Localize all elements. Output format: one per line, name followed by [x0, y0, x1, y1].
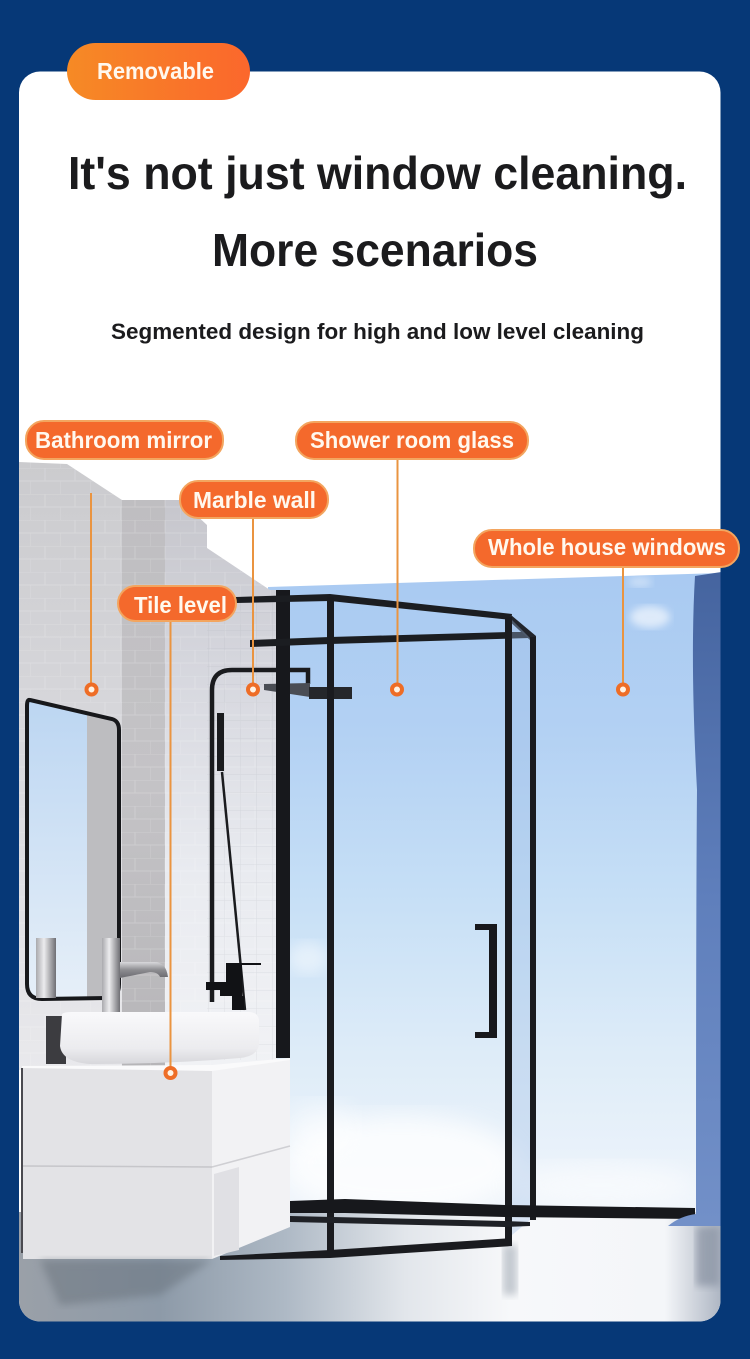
callout: Shower room glass [296, 422, 528, 694]
curtain [668, 572, 721, 1226]
basin and faucet [46, 938, 259, 1064]
shower enclosure frame [220, 590, 695, 1260]
title: It's not just window cleaning. [68, 147, 687, 199]
tag: Removable: Removable [97, 58, 214, 84]
callout: Tile level: Tile level [134, 592, 227, 618]
callout: Marble wall: Marble wall [193, 487, 316, 513]
callout: Shower room glass: Shower room glass [310, 427, 514, 453]
vanity cabinet [21, 1058, 290, 1259]
door handle [475, 924, 497, 1038]
mirror [27, 700, 119, 999]
callout: Bathroom mirror [26, 421, 223, 694]
floor [19, 1212, 721, 1322]
callout: Tile level [118, 586, 236, 1078]
callout: Whole house windows [474, 530, 739, 694]
shower fixture [206, 670, 352, 1010]
callout: Whole house windows: Whole house windows [488, 534, 726, 560]
subtitle: Segmented design for high and low level cleaning [111, 319, 644, 344]
callout: Bathroom mirror: Bathroom mirror [35, 427, 212, 453]
tag: Removable [67, 43, 250, 100]
title [68, 147, 687, 276]
floor shadow [40, 1260, 212, 1305]
title: More scenarios [212, 224, 538, 276]
floor tracks [290, 1199, 695, 1219]
tiled wall [19, 462, 277, 1070]
window sky [268, 573, 721, 1215]
callout: Marble wall [180, 481, 328, 694]
